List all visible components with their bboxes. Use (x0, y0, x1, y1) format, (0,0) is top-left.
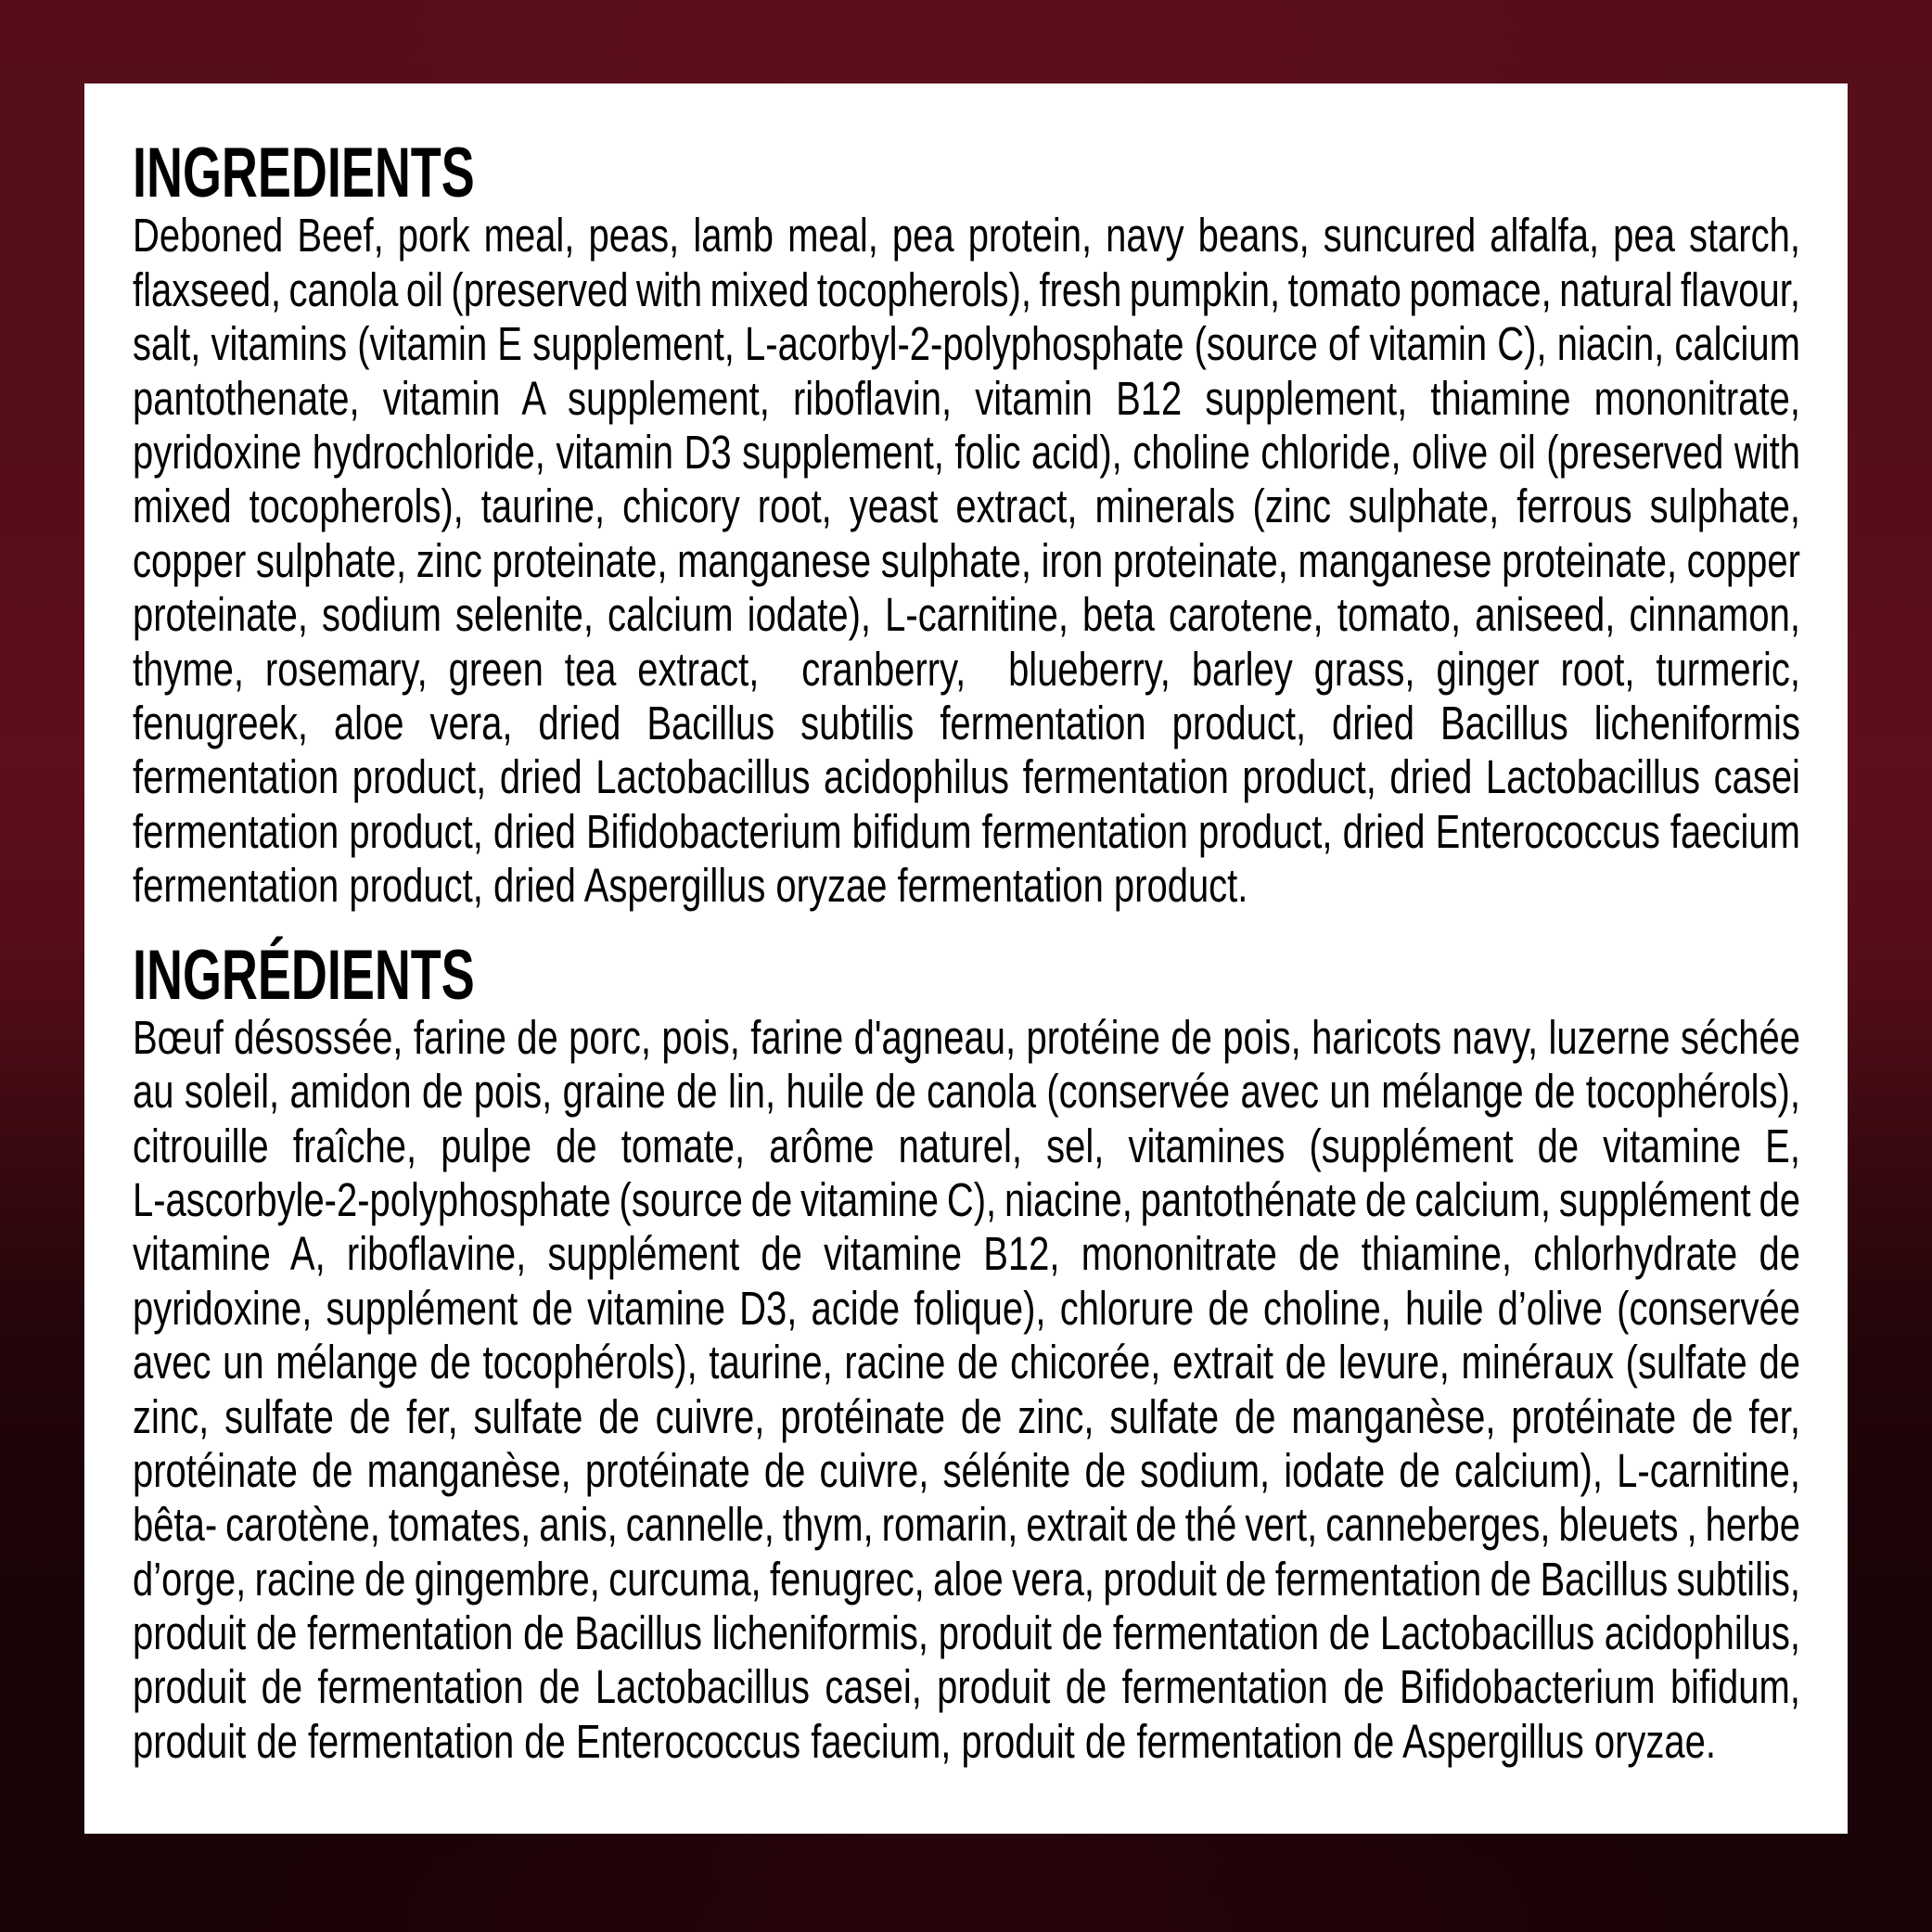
text block: English ingredient list: mixed tocopherols), taurine, chicory root, yeast extract, minerals (zinc sulphate, ferrous sulphate, (133, 480, 1800, 532)
text block: French ingredient list: au soleil, amidon de pois, graine de lin, huile de canola (conservée avec un mélange de tocophérols), (133, 1065, 1800, 1118)
text block: French ingredient list: d’orge, racine de gingembre, curcuma, fenugrec, aloe vera, produit de fermentation de Bacillus subtilis, (133, 1553, 1800, 1606)
text block: French ingredient list: bêta- carotène, tomates, anis, cannelle, thym, romarin, extrait de thé vert, canneberges, bleuets , herbe (133, 1498, 1800, 1551)
text block: English ingredient list: Deboned Beef, pork meal, peas, lamb meal, pea protein, navy beans, suncured alfalfa, pea starch, (133, 209, 1800, 262)
text block: English ingredient list: fermentation product, dried Lactobacillus acidophilus fermentation product, dried Lactobacillus casei (133, 750, 1800, 803)
heading: French ingredients: INGRÉDIENTS (133, 936, 474, 1015)
text block: English ingredient list: proteinate, sodium selenite, calcium iodate), L-carnitine, beta carotene, tomato, aniseed, cinnamon, (133, 588, 1800, 641)
text block: English ingredient list: thyme, rosemary, green tea extract, cranberry, blueberry, barley grass, ginger root, turmeric, (133, 643, 1800, 696)
heading: English ingredients: INGREDIENTS (133, 134, 474, 212)
text block: French ingredient list: produit de fermentation de Bacillus licheniformis, produit de fermentation de Lactobacillus acidophilus, (133, 1606, 1800, 1659)
text block: French ingredient list: vitamine A, riboflavine, supplément de vitamine B12, mononitrate de thiamine, chlorhydrate de (133, 1227, 1800, 1280)
text block: French ingredient list: produit de fermentation de Enterococcus faecium, produit de fermentation de Aspergillus oryzae. (133, 1715, 1716, 1768)
text block: English ingredient list: fenugreek, aloe vera, dried Bacillus subtilis fermentation product, dried Bacillus licheniformis (133, 697, 1800, 749)
text block: French ingredient list (133, 1011, 1800, 1768)
text block: French ingredient list: protéinate de manganèse, protéinate de cuivre, sélénite de sodium, iodate de calcium), L-carnitine, (133, 1444, 1800, 1497)
text block: French ingredient list: produit de fermentation de Lactobacillus casei, produit de fermentation de Bifidobacterium bifidum, (133, 1660, 1800, 1713)
text block: French ingredient list: pyridoxine, supplément de vitamine D3, acide folique), chlorure de choline, huile d’olive (conservée (133, 1282, 1800, 1335)
text block: English ingredient list: pantothenate, vitamin A supplement, riboflavin, vitamin B12 supplement, thiamine mononitrate, (133, 372, 1800, 425)
text block: English ingredient list: fermentation product, dried Aspergillus oryzae fermentation product. (133, 859, 1247, 912)
text block: English ingredient list: salt, vitamins (vitamin E supplement, L-acorbyl-2-polyphosphate (source of vitamin C), niacin, calcium (133, 317, 1800, 370)
text block: English ingredient list: copper sulphate, zinc proteinate, manganese sulphate, iron proteinate, manganese proteinate, copper (133, 534, 1800, 587)
text block: English ingredient list (133, 209, 1800, 912)
text block: French ingredient list: avec un mélange de tocophérols), taurine, racine de chicorée, extrait de levure, minéraux (sulfate de (133, 1336, 1800, 1388)
text block: English ingredient list: flaxseed, canola oil (preserved with mixed tocopherols), fresh pumpkin, tomato pomace, natural flavour, (133, 263, 1800, 316)
text block: French ingredient list: zinc, sulfate de fer, sulfate de cuivre, protéinate de zinc, sulfate de manganèse, protéinate de fer, (133, 1390, 1800, 1443)
text block: English ingredient list: pyridoxine hydrochloride, vitamin D3 supplement, folic acid), choline chloride, olive oil (preserved with (133, 426, 1800, 479)
text block: French ingredient list: Bœuf désossée, farine de porc, pois, farine d'agneau, protéine de pois, haricots navy, luzerne séchée (133, 1011, 1800, 1064)
text block: English ingredient list: fermentation product, dried Bifidobacterium bifidum fermentation product, dried Enterococcus faecium (133, 805, 1800, 858)
text block: French ingredient list: citrouille fraîche, pulpe de tomate, arôme naturel, sel, vitamines (supplément de vitamine E, (133, 1120, 1800, 1172)
text block: French ingredient list: L-ascorbyle-2-polyphosphate (source de vitamine C), niacine, pantothénate de calcium, supplément de (133, 1173, 1800, 1226)
